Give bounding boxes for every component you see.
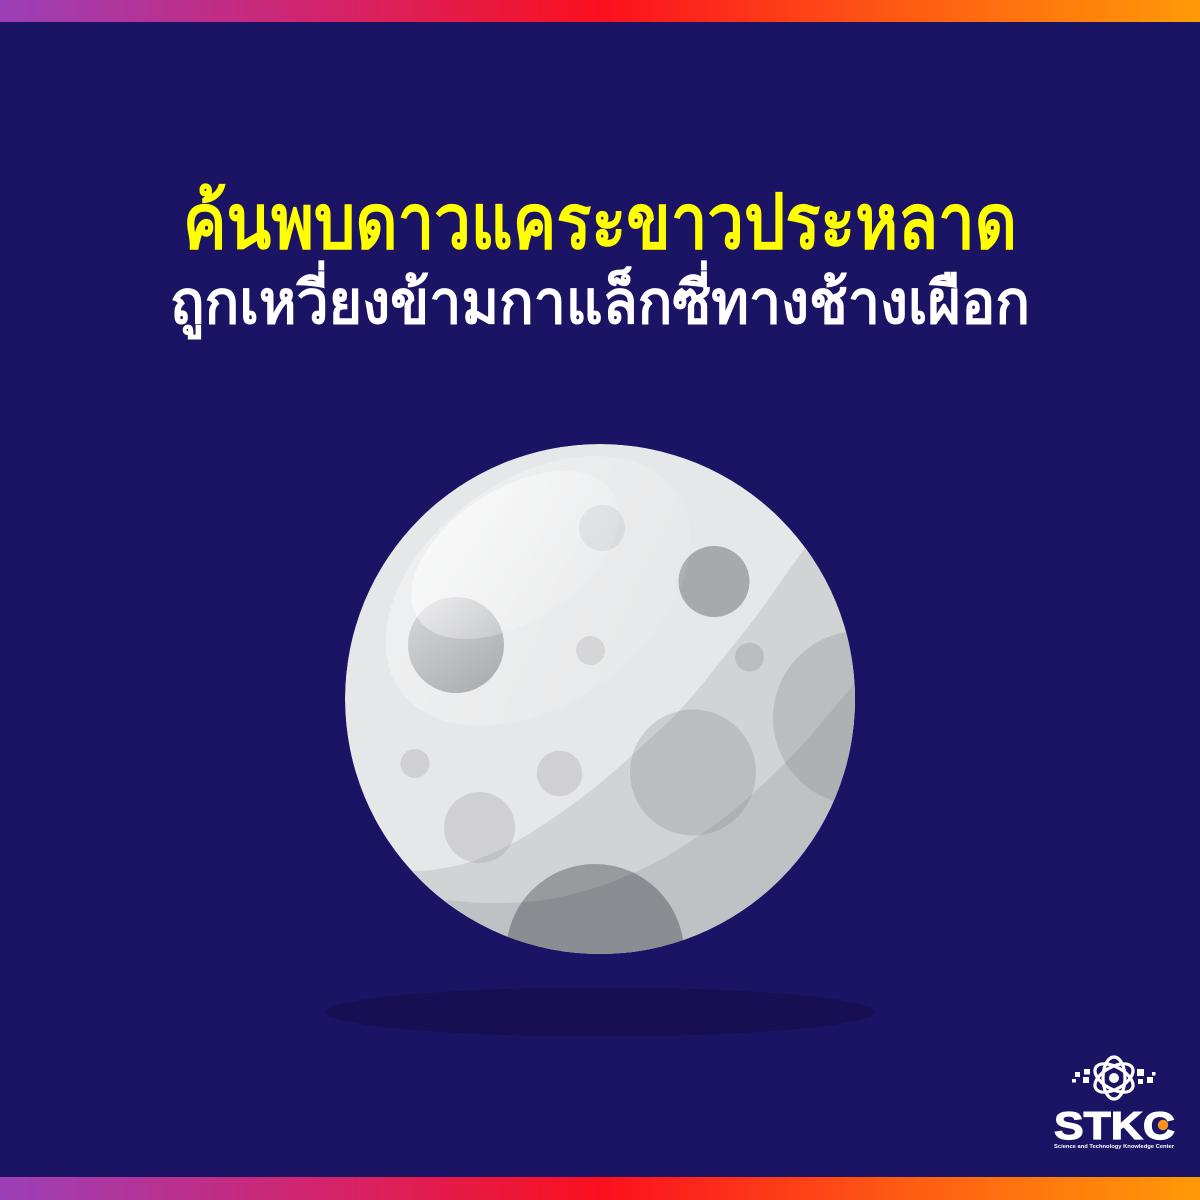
bottom gradient bar bbox=[0, 1177, 1200, 1200]
crater: lower left bbox=[444, 792, 515, 863]
title line 1: ค้นพบดาวแคระขาวประหลาด bbox=[183, 180, 1017, 265]
STKC logo bbox=[1054, 1057, 1175, 1150]
logo wordmark: STKC bbox=[1054, 1105, 1175, 1148]
crater: gradient upper left bbox=[408, 597, 504, 693]
crater: small right bbox=[735, 642, 764, 672]
crater: bottom large bbox=[508, 864, 683, 954]
ground shadow bbox=[325, 988, 875, 1036]
logo orange dot bbox=[1158, 1120, 1168, 1130]
logo pixel dots bbox=[1072, 1069, 1156, 1084]
crater: right edge bbox=[773, 632, 855, 800]
top gradient bar bbox=[0, 0, 1200, 22]
crater: center large bbox=[630, 710, 756, 836]
crater: small lower middle bbox=[537, 751, 582, 796]
highlight inner bbox=[412, 488, 502, 639]
highlight outer bbox=[386, 530, 438, 647]
crater: small center bbox=[576, 636, 605, 665]
crater: small left bbox=[400, 749, 430, 778]
crater: dark upper right bbox=[678, 546, 750, 617]
moon base bbox=[345, 444, 855, 954]
moon illustration bbox=[345, 444, 855, 954]
crater: top small bbox=[579, 505, 625, 551]
shaded crescent dark bbox=[444, 684, 855, 954]
title bbox=[170, 180, 1030, 340]
title line 2: ถูกเหวี่ยงข้ามกาแล็กซี่ทางช้างเผือก bbox=[170, 260, 1030, 340]
logo atom icon bbox=[1090, 1057, 1138, 1099]
logo tagline: Science and Technology Knowledge Center bbox=[1054, 1144, 1175, 1150]
shaded crescent light bbox=[413, 548, 855, 954]
